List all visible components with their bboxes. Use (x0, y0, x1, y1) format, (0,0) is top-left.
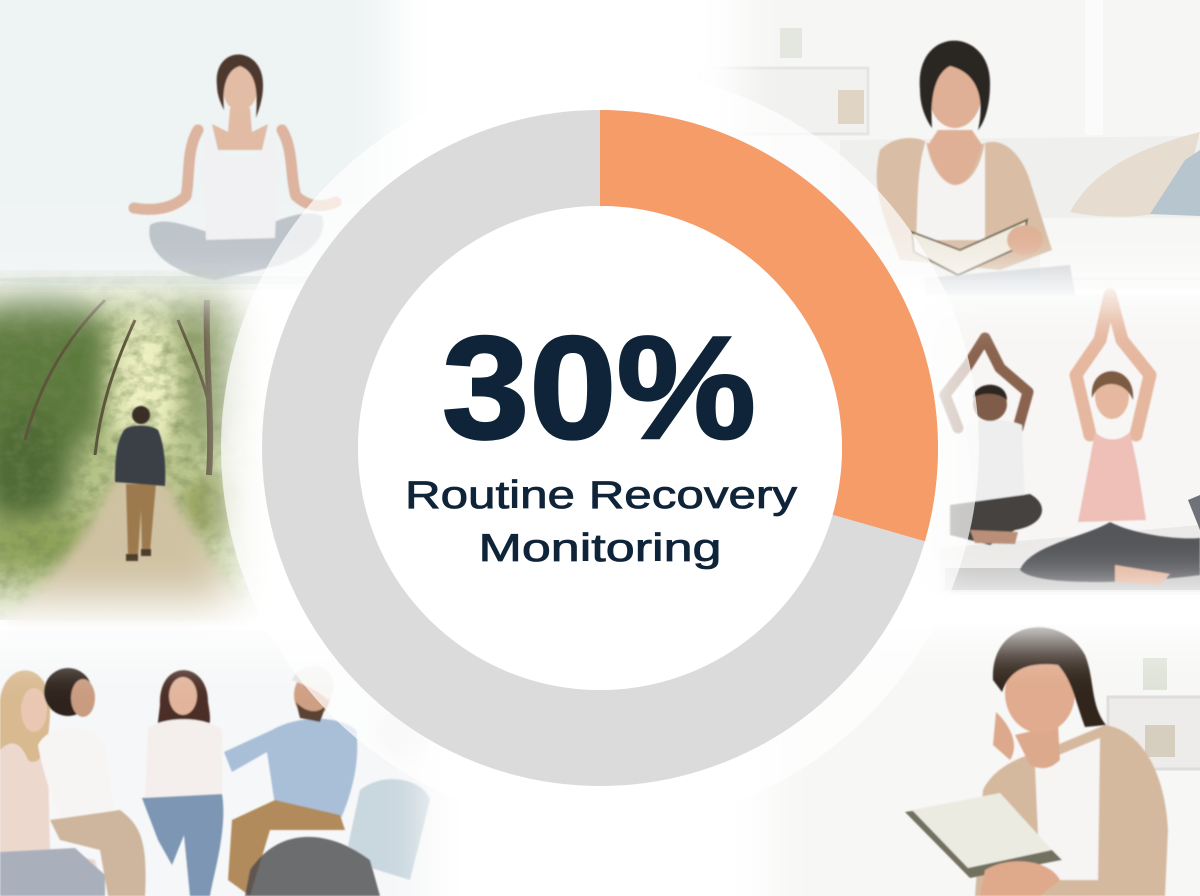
caption (405, 474, 798, 570)
figure: meditating woman (134, 54, 336, 280)
figure: reading woman (877, 41, 1075, 295)
donut chart (310, 110, 938, 738)
photo: yoga class (910, 295, 1200, 595)
donut track: remaining share (310, 158, 890, 738)
figure: yoga man (945, 338, 1042, 545)
caption: Monitoring (478, 527, 722, 570)
figure: blond woman (0, 670, 105, 896)
figure: woman in white blouse (142, 670, 223, 896)
photo: woman reading on sofa (690, 0, 1200, 295)
donut centre (358, 206, 842, 690)
figure: faded seated person (244, 778, 430, 896)
figure: bearded man in blue shirt (224, 666, 357, 896)
photo: woman reading by the window (804, 626, 1200, 896)
translucent halo ring (221, 69, 979, 827)
figure: walking man (115, 406, 165, 561)
headline value: 30% (442, 306, 756, 469)
photo: meditation by the water (0, 0, 390, 290)
figure: curly-haired woman (38, 668, 146, 896)
photo: support group (0, 666, 430, 896)
caption: Routine Recovery (405, 474, 798, 517)
figure: yoga woman in pink (1020, 295, 1200, 585)
photo: forest path walk (0, 270, 253, 623)
donut segment: 30 percent (600, 110, 938, 541)
figure: smiling woman with book (905, 627, 1168, 896)
